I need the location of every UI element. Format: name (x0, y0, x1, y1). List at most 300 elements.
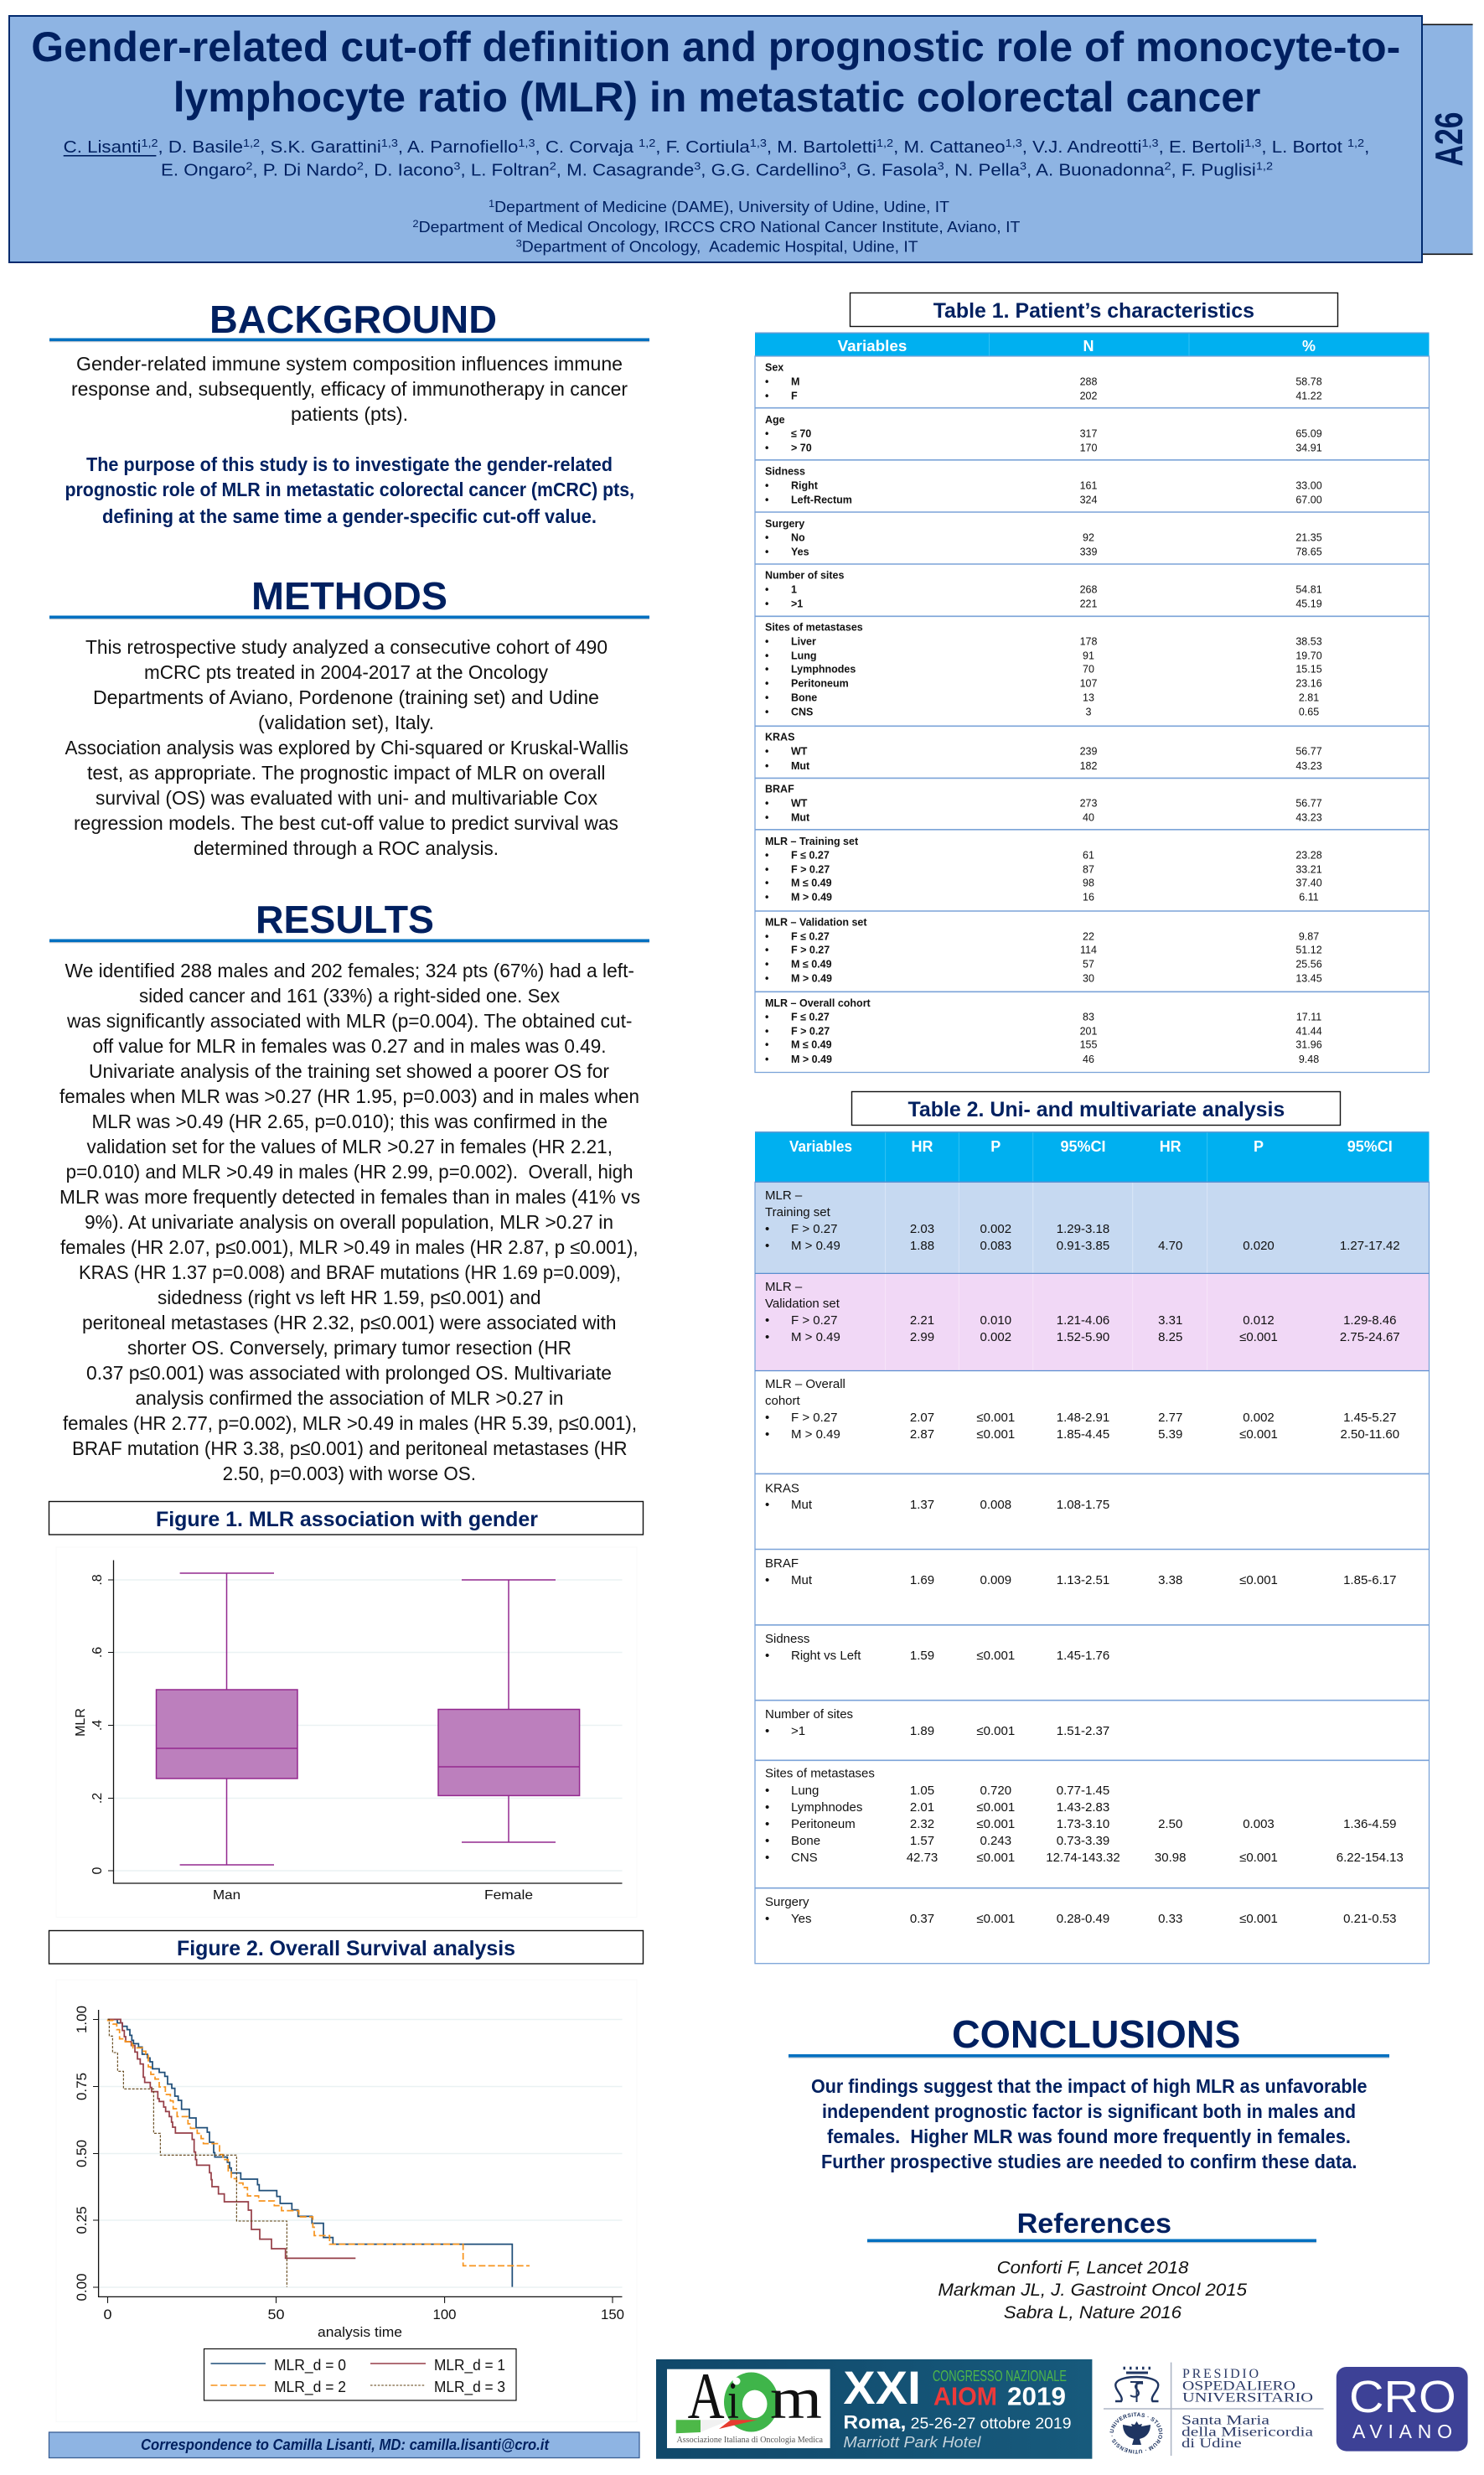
row: KRAS: KRAS (765, 731, 794, 743)
figure 1 title box (49, 1502, 644, 1535)
row: sites of metastases: • (765, 1851, 769, 1865)
row: MLR training set: 0.020 (1243, 1239, 1275, 1253)
row: MLR training set: 0.083 (980, 1239, 1011, 1253)
congress text: CONGRESSO NAZIONALE (933, 2368, 1067, 2384)
authors: , G. Fasola (846, 161, 938, 179)
row: MLR training set: 1.29-3.18 (1057, 1222, 1109, 1236)
row: KRAS: 1.08-1.75 (1057, 1498, 1109, 1512)
table 1 title box (850, 293, 1337, 327)
authors: 1,3 (1006, 137, 1022, 149)
row: BRAF: 40 (1083, 812, 1094, 824)
methods text: Departments of Aviano, Pordenone (training set) and Udine (93, 686, 599, 708)
row: age: Age (765, 414, 785, 426)
row: sidness: 33.00 (1295, 479, 1322, 491)
results text: sidedness (right vs left HR 1.59, p≤0.001) and (158, 1287, 541, 1308)
row: MLR validation set: 2.99 (910, 1330, 934, 1344)
row: sites of metastases: ≤0.001 (976, 1851, 1015, 1865)
row: sites of metastases: 1.43-2.83 (1057, 1800, 1109, 1815)
authors: , D. Iacono (364, 161, 453, 179)
row: BRAF: 1.85-6.17 (1343, 1573, 1396, 1587)
authors: , M. Cattaneo (893, 138, 1006, 157)
authors: 3 (840, 159, 846, 173)
row: MLR training set: Training set (765, 1205, 831, 1219)
authors: , D. Basile (158, 138, 243, 157)
row: age: 34.91 (1295, 443, 1322, 454)
row: sidness: • (765, 479, 768, 491)
row: surgery: 92 (1083, 531, 1094, 543)
row: MLR training set: • (765, 850, 768, 862)
AIOM emblem: m (770, 2367, 822, 2431)
axes: 150 (601, 2307, 624, 2322)
row: age: ≤ 70 (791, 427, 811, 439)
row: MLR overall cohort: MLR – Overall cohort (765, 997, 871, 1009)
row: surgery: ≤0.001 (1239, 1912, 1278, 1926)
row: sidness: Right vs Left (791, 1649, 861, 1663)
row: sites of metastases: 6.22-154.13 (1337, 1851, 1404, 1865)
row: MLR overall cohort: F > 0.27 (791, 1026, 830, 1038)
row: MLR validation set: 1.29-8.46 (1343, 1313, 1396, 1328)
row: sites of metastases: CNS (791, 707, 813, 718)
reference list (938, 2259, 1247, 2322)
row: sites of metastases: • (765, 692, 768, 704)
logo: CRO Aviano (1337, 2367, 1468, 2452)
row: MLR overall cohort: 1.85-4.45 (1057, 1427, 1109, 1442)
category labels: Man (213, 1888, 240, 1903)
table 2 title box: Table 2. Uni- and multivariate analysis (908, 1098, 1285, 1121)
row: MLR training set: • (765, 864, 768, 876)
figure 2 title box: Figure 2. Overall Survival analysis (177, 1937, 515, 1960)
authors: , A. Buonadonna (1026, 161, 1165, 179)
row: MLR validation set: 51.12 (1295, 945, 1322, 956)
authors: , E. Bertoli (1159, 138, 1244, 157)
row: KRAS: 1.37 (910, 1498, 934, 1512)
row: MLR validation set: • (765, 945, 768, 956)
row: surgery (765, 1895, 1396, 1926)
affiliations: Department of Medical Oncology, IRCCS CRO National Cancer Institute, Aviano, IT (419, 219, 1020, 236)
row: MLR overall cohort: M > 0.49 (791, 1427, 840, 1442)
congress text: XXI (843, 2361, 921, 2414)
conclusions text: independent prognostic factor is significant both in males and (822, 2100, 1356, 2122)
y axis and ticks: .4 (90, 1720, 105, 1731)
table 2 header (755, 1131, 1430, 1182)
results text: shorter OS. Conversely, primary tumor resection (HR (127, 1337, 571, 1359)
row: sites of metastases: ≤0.001 (1239, 1851, 1278, 1865)
row: surgery: • (765, 1912, 769, 1926)
title (31, 23, 1400, 121)
methods text: This retrospective study analyzed a consecutive cohort of 490 (85, 636, 608, 658)
row: sites of metastases: • (765, 1800, 769, 1815)
authors: 1,2 (1347, 137, 1364, 149)
results text: KRAS (HR 1.37 p=0.008) and BRAF mutations (HR 1.69 p=0.009), (79, 1261, 621, 1283)
row: sites of metastases: 42.73 (907, 1851, 938, 1865)
authors: , F. Cortiula (655, 138, 751, 157)
table 1: patient characteristics (755, 332, 1430, 1073)
row: MLR validation set: F > 0.27 (791, 945, 830, 956)
row: sites of metastases: Lymphnodes (791, 1800, 862, 1815)
row: number of sites: 1.51-2.37 (1057, 1724, 1109, 1738)
row: sites of metastases: Sites of metastases (765, 621, 863, 633)
category labels: Female (484, 1888, 533, 1903)
row: number of sites: Number of sites (765, 1707, 853, 1722)
row: age: • (765, 443, 768, 454)
background text: patients (pts). (291, 403, 408, 425)
row: MLR training set: • (765, 1239, 769, 1253)
row: number of sites: 221 (1080, 598, 1097, 610)
row: MLR validation set: 0.002 (980, 1330, 1011, 1344)
authors: 1,3 (750, 137, 767, 149)
table 2 title box (851, 1091, 1341, 1125)
row: MLR training set: 6.11 (1299, 892, 1319, 904)
heading: references: References (1017, 2208, 1171, 2239)
methods text: (validation set), Italy. (258, 712, 434, 733)
panel: background (49, 298, 649, 527)
row: sites of metastases: 19.70 (1295, 650, 1322, 662)
row: sites of metastases: Peritoneum (791, 1817, 856, 1831)
row: surgery: 0.28-0.49 (1057, 1912, 1109, 1926)
row: MLR overall cohort: F > 0.27 (791, 1411, 837, 1425)
study purpose statement: defining at the same time a gender-specific cut-off value. (102, 505, 597, 527)
authors: 2 (550, 159, 556, 173)
row: BRAF (765, 783, 1322, 824)
row: sex (765, 362, 1322, 402)
row: surgery: Yes (791, 546, 809, 558)
legend: MLR_d = 3 (434, 2379, 505, 2396)
row: KRAS: Mut (791, 760, 810, 772)
row: MLR validation set: 114 (1080, 945, 1097, 956)
axes (74, 2006, 624, 2340)
row: surgery: Surgery (765, 518, 804, 530)
survival curves (108, 2019, 530, 2287)
row: sites of metastases: Peritoneum (791, 677, 849, 689)
affiliations: Department of Oncology, Academic Hospital, Udine, IT (522, 238, 918, 255)
row: number of sites: >1 (791, 598, 803, 610)
row: MLR training set: 1.88 (910, 1239, 934, 1253)
authors: 1,2 (243, 137, 260, 149)
panel: results (49, 898, 649, 1484)
AIOM emblem: A (688, 2359, 725, 2432)
axes: 0.75 (74, 2073, 90, 2100)
authors: , C. Corvaja (535, 138, 639, 157)
authors: 1,3 (518, 137, 535, 149)
row: MLR validation set: • (765, 931, 768, 943)
row: BRAF: 1.13-2.51 (1057, 1573, 1109, 1587)
figure 1 title box: Figure 1. MLR association with gender (156, 1508, 538, 1531)
row: sites of metastases: 1.73-3.10 (1057, 1817, 1109, 1831)
row: MLR training set: • (765, 878, 768, 889)
row: sites of metastases: 0.720 (980, 1784, 1011, 1798)
authors: 2 (1164, 159, 1171, 173)
icon: university seal: UNIVERSITAS · STUDIORUM · UTINENSIS · (1109, 2412, 1163, 2454)
row: surgery: 21.35 (1295, 531, 1322, 543)
row: BRAF: Mut (791, 812, 810, 824)
results text: off value for MLR in females was 0.27 and in males was 0.49. (92, 1035, 607, 1057)
heading: background: BACKGROUND (209, 298, 497, 341)
row: BRAF: BRAF (765, 1556, 799, 1571)
congress text (843, 2361, 1071, 2451)
row: KRAS: • (765, 1498, 769, 1512)
row: sex: 58.78 (1295, 375, 1322, 387)
row: MLR validation set: 3.31 (1158, 1313, 1182, 1328)
row: MLR validation set: • (765, 1330, 769, 1344)
authors: , L. Bortot (1261, 138, 1347, 157)
row: sites of metastases: 3 (1086, 707, 1092, 718)
methods text: regression models. The best cut-off value to predict survival was (74, 812, 618, 834)
row: surgery: Yes (791, 1912, 811, 1926)
legend (204, 2348, 516, 2400)
table 1 header (755, 332, 1430, 356)
row: MLR validation set: ≤0.001 (1239, 1330, 1278, 1344)
row: MLR overall cohort: 1.45-5.27 (1343, 1411, 1396, 1425)
row: sites of metastases: CNS (791, 1851, 818, 1865)
row: MLR overall cohort: 17.11 (1296, 1012, 1321, 1023)
title: lymphocyte ratio (MLR) in metastatic colorectal cancer (173, 74, 1260, 121)
legend: MLR_d = 0 (274, 2357, 346, 2374)
authors: , N. Pella (944, 161, 1021, 179)
congress text: 2019 (1007, 2381, 1066, 2410)
authors: 1,2 (876, 137, 893, 149)
authors: 3 (938, 159, 944, 173)
results text: p=0.010) and MLR >0.49 in males (HR 2.99, p=0.002). Overall, high (66, 1161, 633, 1183)
row: MLR training set: 0.002 (980, 1222, 1011, 1236)
reference list: Markman JL, J. Gastroint Oncol 2015 (938, 2281, 1247, 2300)
authors: , G.G. Cardellino (701, 161, 840, 179)
panel: conclusions (789, 2012, 1389, 2172)
row: MLR overall cohort (765, 997, 1322, 1065)
authors: C. Lisanti (64, 138, 133, 157)
row: sites of metastases: 30.98 (1155, 1851, 1186, 1865)
logo: CRO Aviano: AVIANO (1352, 2421, 1452, 2442)
row: KRAS: • (765, 760, 768, 772)
row: MLR validation set: F > 0.27 (791, 1313, 837, 1328)
row: sidness (765, 466, 1322, 506)
reference list: Sabra L, Nature 2016 (1004, 2303, 1182, 2322)
authors: , S.K. Garattini (260, 138, 381, 157)
row: MLR overall cohort: 155 (1080, 1039, 1097, 1051)
authors: 3 (453, 159, 460, 173)
table 2 header: 95%CI (1347, 1138, 1393, 1155)
table 1 title box: Table 1. Patient’s characteristics (933, 299, 1254, 323)
row: MLR overall cohort: ≤0.001 (976, 1427, 1015, 1442)
row: number of sites: 1.89 (910, 1724, 934, 1738)
row: age: > 70 (791, 443, 812, 454)
affiliations: 3 (516, 238, 522, 250)
row: sites of metastases: Lymphnodes (791, 664, 856, 676)
row: sites of metastases: 13 (1083, 692, 1094, 704)
hospital name: PRESIDIO (1182, 2367, 1259, 2381)
row: sites of metastases: 12.74-143.32 (1046, 1851, 1120, 1865)
axes: analysis time (318, 2324, 402, 2340)
row: surgery: 0.21-0.53 (1343, 1912, 1396, 1926)
methods text: survival (OS) was evaluated with uni- and multivariable Cox (96, 787, 597, 809)
row: number of sites (765, 1707, 1109, 1738)
logo: AIOM 2019 congress banner (656, 2359, 1092, 2459)
methods text: mCRC pts treated in 2004-2017 at the Oncology (144, 661, 548, 683)
row: MLR overall cohort: cohort (765, 1394, 801, 1408)
row: sidness (765, 1632, 1109, 1663)
row: MLR overall cohort: 2.07 (910, 1411, 934, 1425)
row: sites of metastases: 178 (1080, 636, 1097, 648)
row: sites of metastases: Lung (791, 1784, 819, 1798)
row: sex: 288 (1080, 375, 1097, 387)
axes: 0.50 (74, 2140, 90, 2167)
row: surgery: • (765, 546, 768, 558)
row: MLR overall cohort: • (765, 1012, 768, 1023)
row: MLR training set: • (765, 892, 768, 904)
row: MLR overall cohort: 2.77 (1158, 1411, 1182, 1425)
row: sites of metastases: 91 (1083, 650, 1094, 662)
authors: 1,3 (1141, 137, 1159, 149)
row: MLR validation set: MLR – Validation set (765, 917, 867, 929)
background text: response and, subsequently, efficacy of immunotherapy in cancer (71, 378, 628, 400)
row: sites of metastases: 0.65 (1299, 707, 1319, 718)
row: number of sites: 45.19 (1295, 598, 1322, 610)
box: female (438, 1580, 580, 1842)
row: sites of metastases: • (765, 650, 768, 662)
table 1 header: % (1302, 338, 1316, 355)
authors: 1,2 (1256, 159, 1273, 173)
row: MLR overall cohort: F ≤ 0.27 (791, 1012, 830, 1023)
row: MLR validation set: 9.87 (1299, 931, 1319, 943)
row: KRAS: Mut (791, 1498, 813, 1512)
affiliations: 1 (489, 198, 495, 210)
row: sites of metastases: • (765, 664, 768, 676)
AIOM emblem: Associazione Italiana di Oncologia Medica (677, 2436, 824, 2445)
row: MLR overall cohort: 31.96 (1295, 1039, 1322, 1051)
y axis and ticks: .6 (90, 1647, 105, 1658)
affiliations: Department of Medicine (DAME), University of Udine, Udine, IT (494, 199, 949, 215)
hospital name: UNIVERSITARIO (1182, 2390, 1313, 2405)
row: MLR training set: 0.91-3.85 (1057, 1239, 1109, 1253)
y axis and ticks: .8 (90, 1574, 105, 1586)
conclusions text: Further prospective studies are needed to confirm these data. (821, 2151, 1357, 2172)
row: sex: • (765, 391, 768, 402)
row: MLR validation set: 1.21-4.06 (1057, 1313, 1109, 1328)
row: MLR training set: MLR – Training set (765, 836, 859, 847)
table 2 header: P (1254, 1138, 1264, 1155)
affiliations (412, 198, 1020, 255)
row: MLR training set: F > 0.27 (791, 1222, 837, 1236)
row: KRAS: • (765, 746, 768, 758)
row: number of sites: 1 (791, 584, 797, 596)
row: MLR overall cohort: 83 (1083, 1012, 1094, 1023)
row: MLR validation set: • (765, 959, 768, 971)
row: MLR training set: M > 0.49 (791, 1239, 840, 1253)
table 1 header: N (1083, 338, 1094, 355)
row: BRAF: • (765, 812, 768, 824)
row: MLR training set: 98 (1083, 878, 1094, 889)
methods text: Association analysis was explored by Chi-squared or Kruskal-Wallis (65, 737, 628, 759)
heading: conclusions: CONCLUSIONS (952, 2012, 1240, 2056)
row: BRAF: WT (791, 798, 808, 810)
row: BRAF: 43.23 (1295, 812, 1322, 824)
row: sites of metastases: • (765, 677, 768, 689)
y axis and ticks: .2 (90, 1793, 105, 1804)
row: surgery (765, 518, 1322, 558)
row: MLR training set (765, 1188, 1400, 1253)
results text: MLR was more frequently detected in females than in males (41% vs (59, 1186, 640, 1208)
row: MLR validation set (765, 1280, 1400, 1344)
row: KRAS: 56.77 (1295, 746, 1322, 758)
row: MLR overall cohort: • (765, 1411, 769, 1425)
row: sites of metastases: 0.003 (1243, 1817, 1275, 1831)
row: MLR training set (765, 836, 1322, 904)
authors: 2 (246, 159, 252, 173)
row: MLR validation set: 0.012 (1243, 1313, 1275, 1328)
results text: 2.50, p=0.003) with worse OS. (223, 1463, 476, 1484)
authors: E. Ongaro (161, 161, 237, 179)
row: MLR training set: 1.27-17.42 (1340, 1239, 1400, 1253)
y axis and ticks: MLR (74, 1708, 88, 1737)
row: number of sites (765, 569, 1322, 610)
icon: crest monogram (1115, 2369, 1158, 2402)
row: sites of metastases: Lung (791, 650, 817, 662)
row: MLR validation set: 2.21 (910, 1313, 934, 1328)
heading: results: RESULTS (256, 898, 434, 941)
row: MLR training set: 23.28 (1295, 850, 1322, 862)
conclusions text: females. Higher MLR was found more frequently in females. (827, 2125, 1351, 2147)
row: MLR overall cohort (765, 1377, 1399, 1442)
row: sites of metastases: 70 (1083, 664, 1094, 676)
authors: 1,2 (141, 137, 158, 149)
category labels (213, 1888, 533, 1903)
hospital name (1182, 2367, 1313, 2451)
row: MLR overall cohort: 0.002 (1243, 1411, 1275, 1425)
hospital name: Santa Maria (1182, 2413, 1269, 2427)
row: MLR overall cohort: M > 0.49 (791, 1054, 832, 1065)
row: MLR overall cohort: ≤0.001 (976, 1411, 1015, 1425)
row: MLR validation set: 30 (1083, 972, 1094, 984)
congress text: Marriott Park Hotel (843, 2434, 981, 2451)
row: BRAF: 1.69 (910, 1573, 934, 1587)
row: KRAS (765, 731, 1322, 772)
row: MLR validation set: M ≤ 0.49 (791, 959, 832, 971)
row: number of sites: ≤0.001 (976, 1724, 1015, 1738)
row: sites of metastases: 38.53 (1295, 636, 1322, 648)
abstract code tab: A26 (1427, 112, 1471, 166)
panel: references (867, 2208, 1316, 2322)
row: MLR validation set: 22 (1083, 931, 1094, 943)
row: sites of metastases: 0.73-3.39 (1057, 1834, 1109, 1848)
results text (59, 960, 640, 1484)
panel: methods (49, 574, 649, 859)
authors: 3 (694, 159, 701, 173)
row: BRAF: 3.38 (1158, 1573, 1182, 1587)
row: sidness: Right (791, 479, 819, 491)
row: MLR validation set: M > 0.49 (791, 1330, 840, 1344)
row: MLR training set: F ≤ 0.27 (791, 850, 830, 862)
row: MLR validation set (765, 917, 1322, 984)
row: MLR overall cohort: ≤0.001 (1239, 1427, 1278, 1442)
row: MLR validation set: • (765, 1313, 769, 1328)
row: sidness: 161 (1080, 479, 1097, 491)
row: MLR overall cohort: • (765, 1427, 769, 1442)
row: MLR training set: • (765, 1222, 769, 1236)
row: KRAS: WT (791, 746, 808, 758)
row: BRAF: 273 (1080, 798, 1097, 810)
row: MLR overall cohort: 201 (1080, 1026, 1097, 1038)
row: MLR training set: F > 0.27 (791, 864, 830, 876)
logo: Presidio Ospedaliero Universitario (1104, 2362, 1324, 2456)
row: MLR overall cohort: 41.44 (1295, 1026, 1322, 1038)
row: number of sites: • (765, 598, 768, 610)
row: sites of metastases: • (765, 1834, 769, 1848)
results text: We identified 288 males and 202 females; 324 pts (67%) had a left- (65, 960, 634, 981)
row: MLR validation set: • (765, 972, 768, 984)
results text: BRAF mutation (HR 3.38, p≤0.001) and peritoneal metastases (HR (72, 1437, 627, 1459)
row: BRAF: ≤0.001 (1239, 1573, 1278, 1587)
row: surgery: No (791, 531, 805, 543)
congress text: AIOM (933, 2381, 997, 2410)
